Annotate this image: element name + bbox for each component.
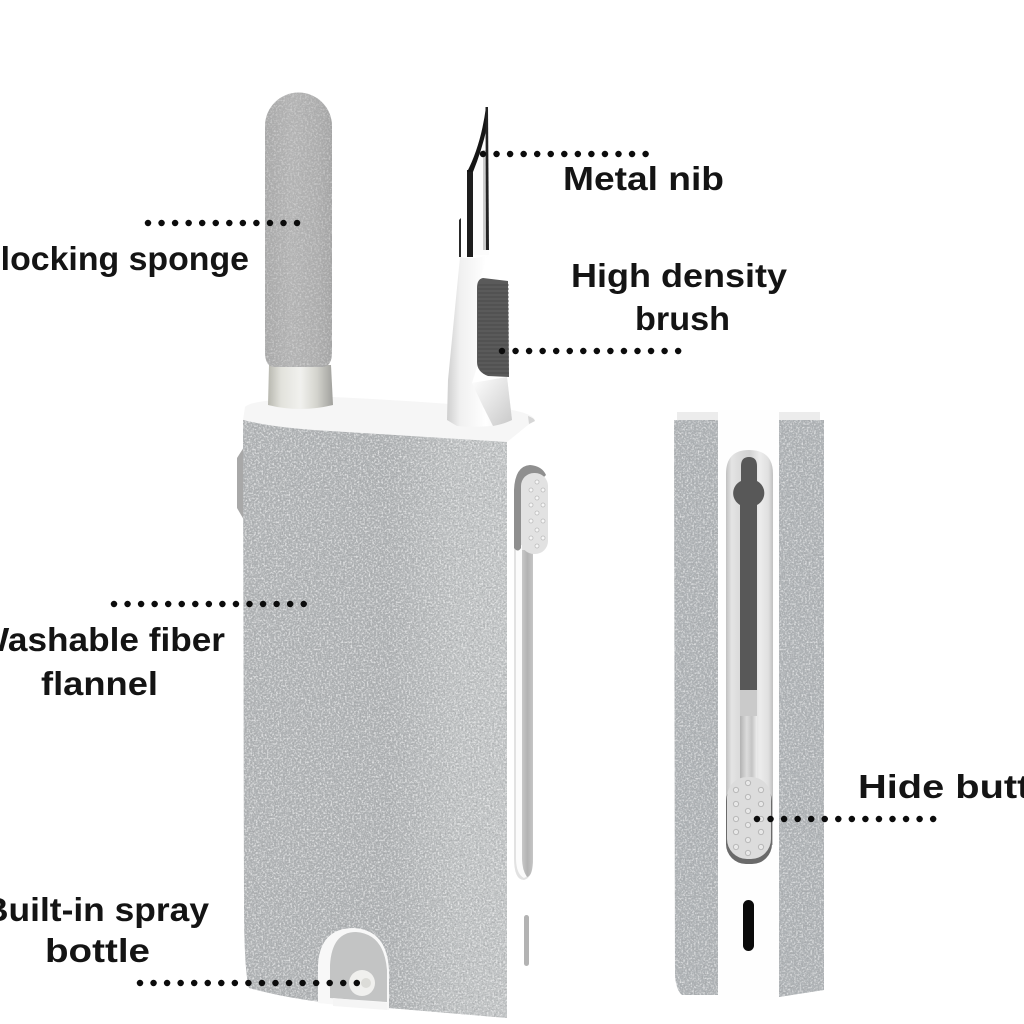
- cap rim shading: [528, 416, 535, 424]
- side nub: [237, 447, 244, 520]
- dark inner bar with keyhole: [733, 457, 764, 690]
- spray bottle opening: [318, 928, 389, 1010]
- side slider button: [514, 465, 548, 554]
- collar: [268, 365, 333, 409]
- callout: built-in spray bottle: bottle: [45, 932, 150, 969]
- metal nib: [467, 107, 489, 257]
- thin secondary blade: [459, 218, 461, 257]
- lower track: [740, 690, 757, 790]
- main device: front view: [237, 397, 548, 1024]
- callout: high density brush: High density: [571, 257, 788, 294]
- callout: built-in spray bottle: [0, 891, 361, 983]
- right fabric panel: [777, 418, 826, 1000]
- side vent slit: [524, 915, 529, 966]
- callout: washable fiber flannel: [0, 604, 307, 702]
- side view of device: [672, 410, 826, 1000]
- callout: high density brush: [502, 257, 788, 351]
- handle foot shading: [472, 377, 512, 426]
- sponge tip: [265, 92, 332, 367]
- callout: high density brush: brush: [635, 300, 730, 337]
- callout: washable fiber flannel: flannel: [41, 665, 158, 702]
- white handle: [447, 255, 512, 427]
- flocking sponge stick: [262, 90, 336, 409]
- side slider track: [514, 540, 533, 966]
- top white cap: [243, 397, 535, 442]
- black vent slit: [743, 900, 754, 951]
- callout: metal nib: Metal nib: [563, 160, 724, 197]
- left fabric panel: [672, 418, 720, 998]
- brush bristles: [477, 278, 509, 377]
- metal nib and brush tool: [447, 107, 512, 427]
- slider slot: [726, 450, 773, 845]
- top band: [677, 412, 820, 421]
- white centre panel: [718, 410, 779, 1000]
- spray nozzle: [349, 970, 375, 996]
- fabric body: [240, 415, 510, 1024]
- hide button: [726, 777, 772, 864]
